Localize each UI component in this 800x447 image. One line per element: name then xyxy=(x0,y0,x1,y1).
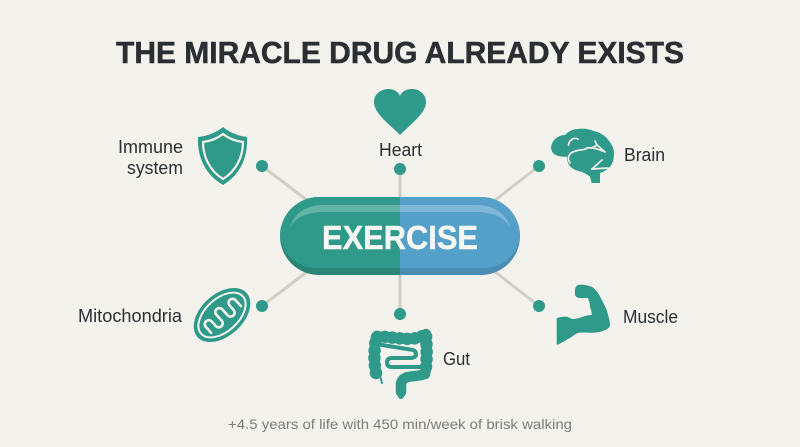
title: THE MIRACLE DRUG ALREADY EXISTS xyxy=(116,35,684,70)
icon: brain xyxy=(551,129,614,183)
icon: mitochondria xyxy=(183,277,261,353)
footer note: +4.5 years of life with 450 min/week of brisk walking xyxy=(228,416,572,432)
label: mitochondria: Mitochondria xyxy=(78,306,183,326)
connector lines xyxy=(262,166,539,314)
label: immune system xyxy=(118,137,183,178)
central pill: exercise xyxy=(280,197,520,275)
connector dots xyxy=(256,160,545,320)
icon: gut xyxy=(374,334,427,396)
label: immune system: system xyxy=(127,158,183,178)
icon: heart xyxy=(374,89,426,135)
icon: shield xyxy=(198,127,247,185)
label: brain: Brain xyxy=(624,145,665,165)
central pill: exercise: EXERCISE xyxy=(322,219,478,256)
label: heart: Heart xyxy=(379,140,422,160)
icon: muscle xyxy=(557,285,610,345)
label: muscle: Muscle xyxy=(623,307,678,327)
label: immune system: Immune xyxy=(118,137,183,157)
label: gut: Gut xyxy=(443,349,470,369)
